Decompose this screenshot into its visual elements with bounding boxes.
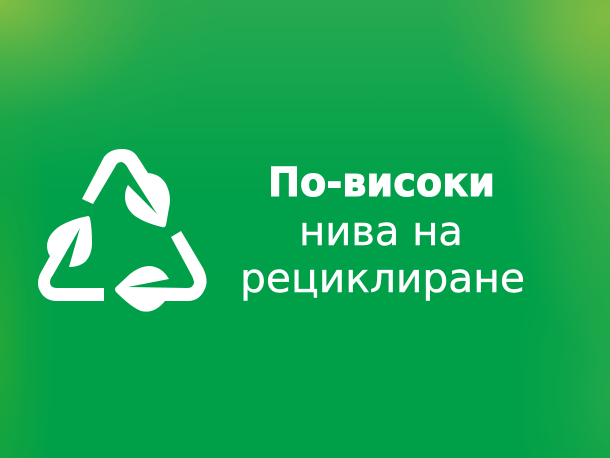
left arrow with leaf: [38, 216, 104, 301]
text: second line: нива на: [299, 209, 463, 255]
right arrow with leaf: [115, 231, 207, 312]
top arrow with leaf: [82, 149, 170, 227]
icon: recycling triangle with leaves: [38, 149, 207, 312]
text: third line: рециклиране: [240, 256, 525, 302]
heading: bold line: По-високи: [268, 160, 495, 206]
